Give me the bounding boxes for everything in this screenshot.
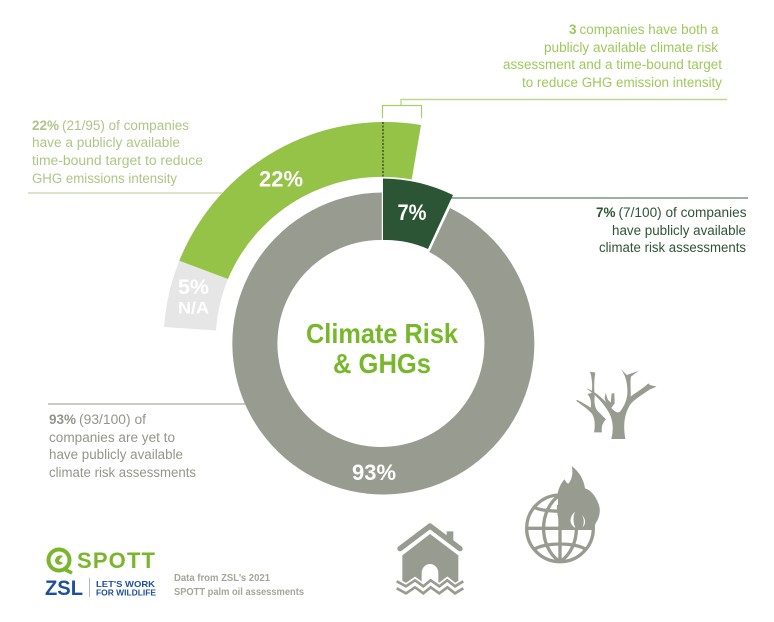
title: & GHGs — [333, 348, 431, 379]
callout: 3 companies: to reduce GHG emission intensity — [522, 75, 722, 90]
callout: 93%: have publicly available — [49, 447, 183, 462]
callout: 3 companies: publicly available climate risk — [544, 40, 718, 55]
label: 22%: 22% — [259, 166, 303, 192]
icon: burning globe — [527, 466, 600, 562]
label: 7%: 7% — [398, 200, 426, 225]
logo: SPOTT: SPOTT — [77, 548, 156, 573]
data source note: SPOTT palm oil assessments — [174, 587, 304, 598]
callout: 22%: have a publicly available — [32, 135, 180, 150]
segment: 93% no assessment — [232, 192, 534, 494]
callout: 22%: time-bound target to reduce — [32, 153, 203, 168]
callout: 3 companies: 3companies have both a — [569, 22, 719, 37]
donut chart — [164, 122, 534, 494]
segment: 7% assessment — [383, 178, 453, 249]
title: Climate Risk — [306, 318, 458, 349]
callout: 3 companies — [503, 22, 722, 90]
callout: 3 companies: assessment and a time-bound target — [503, 57, 722, 72]
segment: 22% target — [179, 122, 421, 279]
leader line: 93% callout — [48, 403, 246, 405]
title — [306, 318, 458, 379]
leader line: 22% callout — [28, 192, 222, 194]
callout: 93%: 93%(93/100) of — [49, 412, 146, 427]
label: 5% N/A: 5% — [178, 276, 209, 299]
callout: 22%: 22%(21/95) of companies — [32, 118, 189, 133]
callout: 7% — [596, 205, 747, 255]
leader line: 7% callout — [450, 197, 748, 199]
label: 5% N/A: N/A — [178, 300, 209, 318]
data source note — [174, 573, 304, 598]
callout: 93% — [49, 412, 196, 480]
logo: ZSL: ZSL — [45, 577, 83, 600]
overlap divider dashed — [382, 122, 384, 177]
logo: ZSL — [45, 577, 156, 600]
label: 5% N/A — [178, 276, 209, 318]
callout: 22% — [32, 118, 203, 186]
callout: 93%: climate risk assessments — [49, 465, 196, 480]
segment: 5% N/A — [164, 261, 228, 330]
logo: ZSL: LET'S WORK — [96, 579, 156, 589]
callout: 7%: 7%(7/100) of companies — [596, 205, 747, 220]
data source note: Data from ZSL’s 2021 — [174, 573, 270, 584]
callout: 93%: companies are yet to — [49, 430, 175, 445]
callout: 7%: climate risk assessments — [599, 240, 746, 255]
callout: 7%: have publicly available — [612, 223, 746, 238]
label: 93%: 93% — [352, 460, 396, 485]
bracket: overlap of both groups — [382, 100, 727, 118]
icon: dead trees — [576, 369, 657, 439]
icon: flooded house — [397, 526, 463, 593]
callout: 22%: GHG emissions intensity — [32, 171, 177, 186]
logo: ZSL: FOR WILDLIFE — [96, 588, 156, 598]
